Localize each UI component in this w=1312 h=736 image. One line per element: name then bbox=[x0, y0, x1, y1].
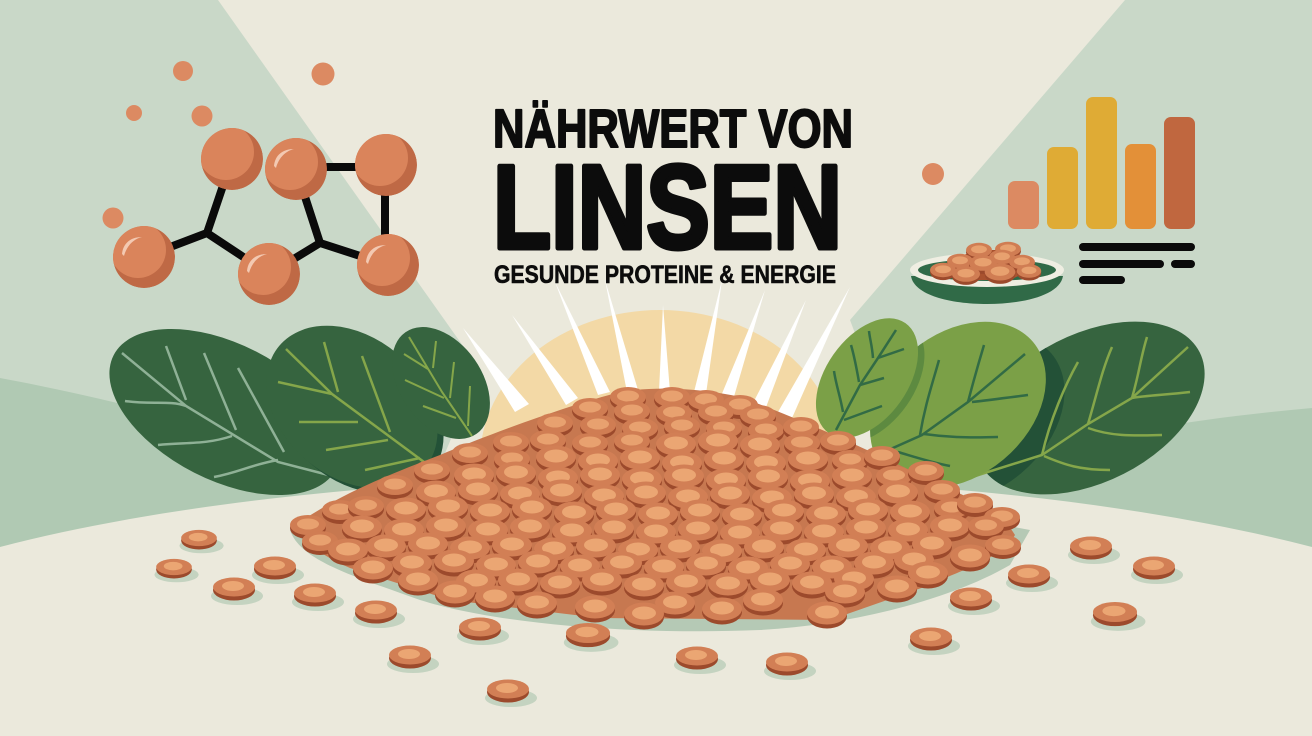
leaf 1 bbox=[83, 295, 367, 529]
legend lines bbox=[1079, 243, 1195, 284]
scattered lentils bbox=[154, 530, 1183, 707]
sun rays bbox=[463, 280, 850, 418]
molecule spheres bbox=[110, 124, 419, 305]
heading: Nährwert von: NÄHRWERT VON bbox=[493, 99, 853, 159]
leaf 6 bbox=[976, 322, 1205, 494]
leaf 4 bbox=[795, 300, 939, 456]
pile base bbox=[300, 389, 1015, 620]
bowl of lentils bbox=[910, 242, 1064, 304]
molecule icon bbox=[110, 124, 419, 305]
molecule bonds bbox=[144, 159, 388, 274]
lentil pile bbox=[290, 387, 1030, 631]
leaf 5 bbox=[870, 322, 1046, 484]
sun semicircle bbox=[480, 310, 840, 460]
left leaves bbox=[83, 292, 510, 529]
leaf 3 bbox=[372, 309, 510, 457]
title bbox=[493, 99, 853, 289]
right leaves bbox=[816, 318, 1205, 494]
subtitle: GESUNDE PROTEINE & ENERGIE bbox=[494, 261, 836, 289]
lentils bbox=[290, 387, 1021, 630]
bar chart bbox=[1008, 97, 1195, 229]
pile shadow bbox=[290, 460, 1030, 631]
leaf 2 bbox=[234, 292, 476, 527]
heading: Linsen: LINSEN bbox=[493, 141, 842, 274]
small decorative dots bbox=[102, 61, 944, 228]
